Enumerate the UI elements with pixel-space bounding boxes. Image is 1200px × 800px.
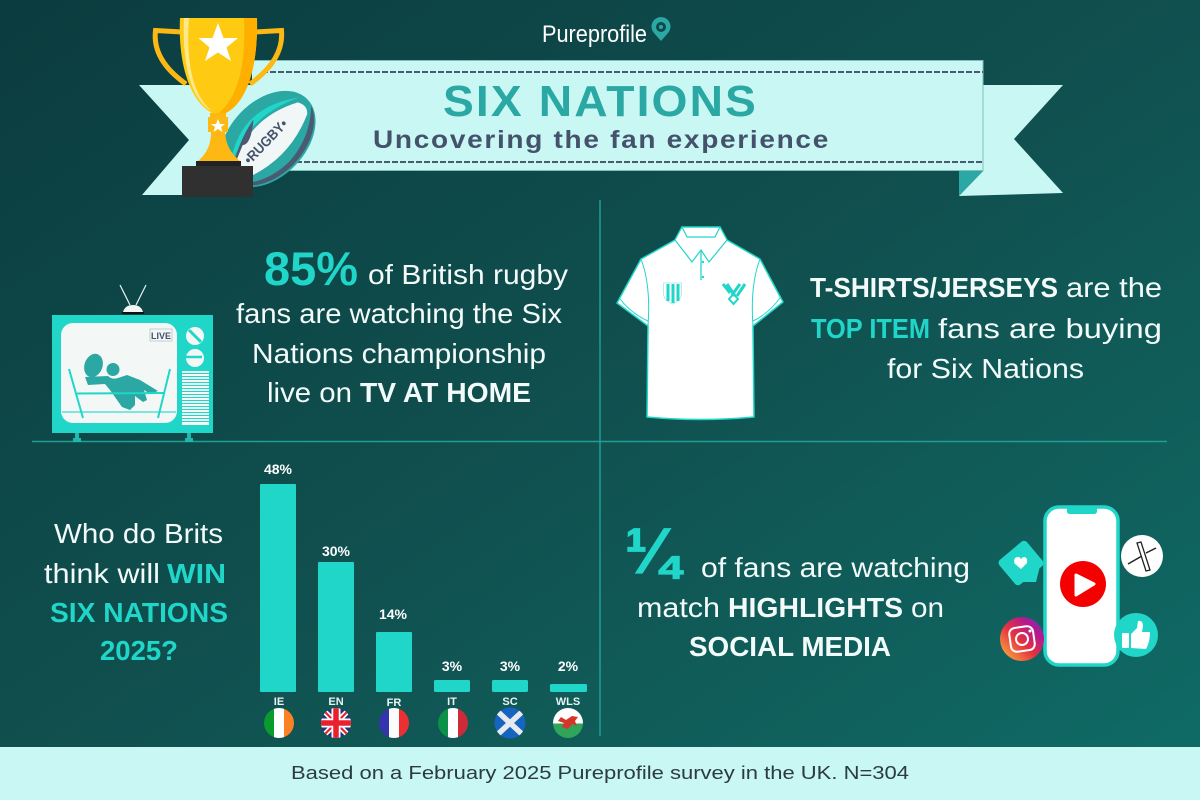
question text bbox=[44, 518, 228, 666]
bar chart: 2% bbox=[558, 658, 579, 674]
bar chart: IE bbox=[274, 696, 284, 708]
icon: flag of England / UK bbox=[321, 708, 351, 738]
icon: flag of France bbox=[379, 708, 409, 738]
icon: television bbox=[52, 285, 213, 442]
bar chart: 3% bbox=[500, 658, 521, 674]
subtitle: Uncovering the fan experience bbox=[373, 126, 830, 154]
logo: Pureprofile: Pureprofile bbox=[542, 21, 647, 48]
icon: trophy bbox=[155, 18, 282, 197]
stat text: one quarter of fans: on bbox=[911, 592, 944, 623]
title: SIX NATIONS bbox=[443, 77, 758, 126]
icon: flag of Ireland bbox=[264, 708, 294, 738]
stat text: 85% watching at home: of British rugby bbox=[368, 259, 568, 290]
bar chart: SC bbox=[502, 696, 518, 708]
icon: X logo bbox=[1121, 535, 1163, 577]
footer band bbox=[0, 747, 1200, 800]
bar chart: 30% bbox=[322, 543, 351, 559]
question text: Who do Brits bbox=[54, 518, 223, 549]
stat text: T-shirts and jerseys: TOP ITEM bbox=[811, 313, 930, 344]
title ribbon bbox=[139, 60, 1063, 196]
phone body bbox=[1045, 507, 1118, 665]
stat text: 85% watching at home bbox=[236, 242, 568, 408]
icon: rugby ball bbox=[202, 72, 334, 206]
icon: flag of Wales bbox=[553, 708, 583, 738]
stat text: 85% watching at home: live on bbox=[267, 377, 352, 408]
stat text: T-shirts and jerseys: are the bbox=[1066, 272, 1162, 303]
bar chart: EN bbox=[328, 696, 344, 708]
stat text: T-shirts and jerseys: T-SHIRTS/JERSEYS bbox=[810, 272, 1058, 303]
icon: rugby ball: •RUGBY• bbox=[240, 116, 291, 167]
icon: thumbs up bbox=[1114, 613, 1158, 657]
icon: heart bubble bbox=[997, 539, 1045, 587]
icon: flag of Italy bbox=[438, 708, 468, 738]
question text: SIX NATIONS bbox=[50, 597, 228, 628]
stat text: one quarter of fans: of fans are watching bbox=[701, 552, 970, 583]
bar chart: 3% bbox=[442, 658, 463, 674]
stat text: 85% watching at home: Nations championship bbox=[252, 338, 546, 369]
stat text: T-shirts and jerseys: fans are buying bbox=[938, 313, 1162, 344]
panel: merchandise bbox=[617, 227, 1162, 420]
icon: flag of Scotland bbox=[494, 707, 526, 739]
panel: TV at home bbox=[52, 242, 568, 442]
stat text: one quarter of fans: SOCIAL MEDIA bbox=[689, 631, 891, 662]
stat text: one quarter of fans bbox=[625, 515, 970, 662]
panel: social media bbox=[625, 507, 1163, 665]
stat text: one quarter of fans: match bbox=[637, 592, 720, 623]
question text: 2025? bbox=[100, 635, 178, 666]
bar chart: WLS bbox=[556, 696, 580, 708]
icon: Instagram bbox=[1000, 617, 1044, 661]
icon: play button bbox=[1060, 561, 1106, 607]
stat text: 85% watching at home: fans are watching the Six bbox=[236, 298, 562, 329]
stat text: one quarter of fans: HIGHLIGHTS bbox=[728, 592, 903, 623]
icon: television: LIVE bbox=[151, 331, 171, 341]
panel: who will win bbox=[44, 461, 587, 739]
icon: polo shirt bbox=[617, 227, 783, 420]
bar chart: FR bbox=[387, 697, 401, 709]
bar chart: 14% bbox=[379, 606, 408, 622]
question text: WIN bbox=[167, 558, 226, 589]
stat text: T-shirts and jerseys bbox=[810, 272, 1162, 384]
stat text: 85% watching at home: TV AT HOME bbox=[360, 377, 531, 408]
bar chart: IT bbox=[447, 696, 457, 708]
divider lines bbox=[32, 200, 1167, 736]
question text: think will bbox=[44, 558, 160, 589]
bar chart bbox=[260, 461, 587, 709]
bar chart: 48% bbox=[264, 461, 293, 477]
stat text: one quarter of fans: ¼ bbox=[625, 515, 684, 587]
stat text: T-shirts and jerseys: for Six Nations bbox=[887, 353, 1084, 384]
footer band: Based on a February 2025 Pureprofile survey in the UK. N=304 bbox=[291, 763, 909, 783]
icon: social media phone bbox=[997, 507, 1163, 665]
stat text: 85% watching at home: 85% bbox=[264, 242, 358, 295]
